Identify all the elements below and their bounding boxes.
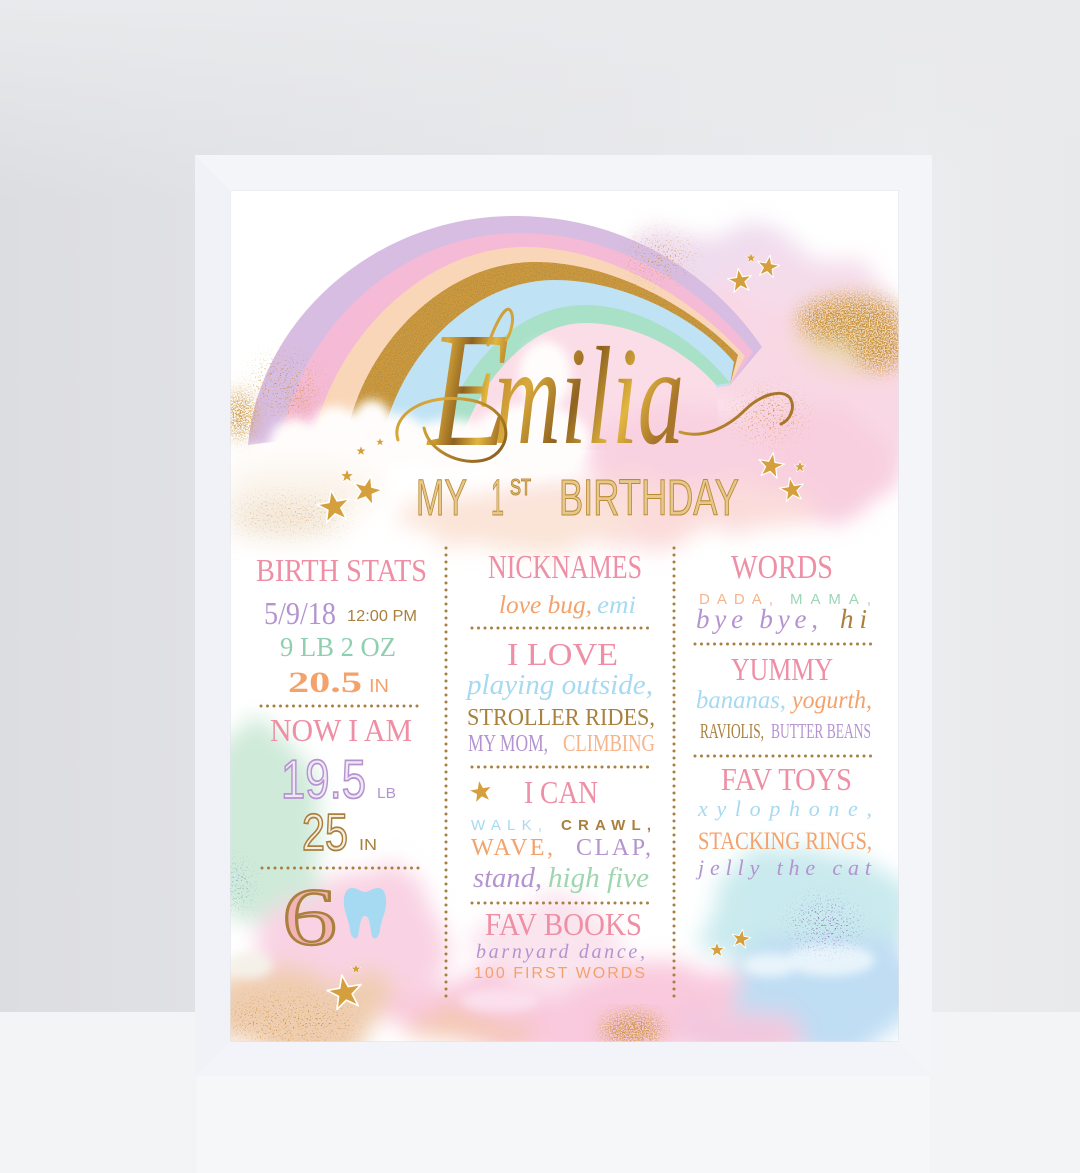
white-blue cloud puffs — [228, 944, 875, 1012]
fav toys text: STACKING RINGS, — [698, 828, 872, 855]
heading: yummy: YUMMY — [731, 651, 833, 687]
words text: bye bye, — [696, 604, 818, 634]
panel: center column — [465, 549, 655, 982]
white-peach wash under title — [220, 301, 900, 534]
dotted column divider left — [444, 548, 448, 998]
I can text: CLAP, — [576, 835, 651, 861]
birth date and time: 12:00 PM — [347, 608, 417, 625]
rainbow — [248, 216, 762, 450]
nicknames text: love bug, — [499, 592, 592, 619]
I love text: playing outside, — [465, 669, 653, 701]
birth date and time — [264, 595, 417, 631]
heading: nicknames: NICKNAMES — [488, 549, 642, 586]
I can text: stand, — [473, 863, 542, 894]
fav toys text: xylophone, — [697, 796, 872, 821]
I love text — [465, 669, 655, 757]
fav books text — [474, 941, 645, 982]
heading: fav toys: FAV TOYS — [721, 761, 852, 797]
I love text: STROLLER RIDES, — [467, 705, 655, 731]
heading: fav books: FAV BOOKS — [485, 906, 642, 942]
heading: I love: I LOVE — [507, 636, 618, 672]
poster artwork — [230, 191, 899, 1042]
yummy text: bananas, — [696, 687, 786, 714]
current weight: 19.5 — [281, 748, 366, 810]
words text — [696, 591, 871, 634]
yummy text: BUTTER BEANS — [771, 719, 871, 743]
panel: birth stats column — [256, 552, 427, 962]
I can text: CRAWL, — [561, 817, 651, 834]
heading: words: WORDS — [731, 549, 833, 586]
name: Emilia — [397, 298, 792, 481]
words text: hi — [840, 604, 867, 634]
table surface — [0, 1012, 1080, 1173]
panel: right column — [695, 549, 872, 880]
fav books text: barnyard dance, — [476, 941, 645, 963]
name: Emilia: milia — [494, 319, 684, 474]
name flourishes — [397, 309, 792, 461]
nicknames text — [499, 592, 636, 619]
heading: now I am: NOW I AM — [270, 712, 412, 748]
white picture frame — [195, 155, 932, 1076]
I can text: high five — [548, 863, 649, 894]
teeth count: 6 — [282, 871, 337, 962]
subtitle: My 1st Birthday: MY — [416, 469, 467, 526]
subtitle: My 1st Birthday: BIRTHDAY — [559, 469, 739, 526]
dotted column divider right — [672, 548, 676, 998]
heading: birth stats: BIRTH STATS — [256, 552, 427, 588]
fav toys text: jelly the cat — [695, 855, 872, 880]
subtitle: My 1st Birthday: 1 — [491, 469, 504, 526]
words text: MAMA, — [790, 591, 871, 608]
yummy text — [696, 687, 872, 743]
subtitle: My 1st Birthday — [416, 469, 739, 526]
subtitle: My 1st Birthday: ST — [510, 474, 531, 500]
birth length — [288, 666, 389, 699]
fine speckle sprays bottom — [225, 861, 857, 1042]
birth weight: 9 LB 2 OZ — [280, 632, 396, 662]
gold sand clouds — [226, 296, 908, 439]
current height: 25 — [302, 804, 348, 862]
icon: tooth — [344, 888, 386, 938]
heading: I can: I CAN — [524, 774, 598, 810]
I can text — [471, 817, 651, 894]
words text: DADA, — [699, 591, 773, 608]
watercolor clouds: pink middle band — [390, 403, 895, 546]
birth date and time: 5/9/18 — [264, 595, 336, 631]
yummy text: yogurth, — [789, 687, 872, 714]
fine gold spray — [230, 238, 805, 531]
fav books text: 100 FIRST WORDS — [474, 965, 645, 982]
inner edge shade — [230, 190, 899, 1042]
yummy text: RAVIOLIS, — [700, 719, 764, 743]
I can text: WAVE, — [471, 835, 553, 861]
I love text: CLIMBING — [563, 731, 655, 757]
gold and purple speckles bottom — [602, 1014, 662, 1046]
current weight: LB — [377, 785, 396, 802]
I can text: WALK, — [471, 817, 542, 834]
name: Emilia: E — [426, 298, 510, 481]
birth length: IN — [369, 676, 389, 696]
stars — [315, 253, 806, 1011]
watercolor cloud: lilac top right — [628, 216, 899, 480]
birth length: 20.5 — [288, 666, 362, 699]
nicknames text: emi — [597, 592, 636, 619]
fav toys text — [695, 796, 872, 880]
white cloud puffs over rainbow — [248, 336, 593, 454]
watercolor clouds: bottom wash — [230, 710, 899, 1042]
I love text: MY MOM, — [468, 731, 548, 757]
current height: IN — [359, 837, 377, 854]
